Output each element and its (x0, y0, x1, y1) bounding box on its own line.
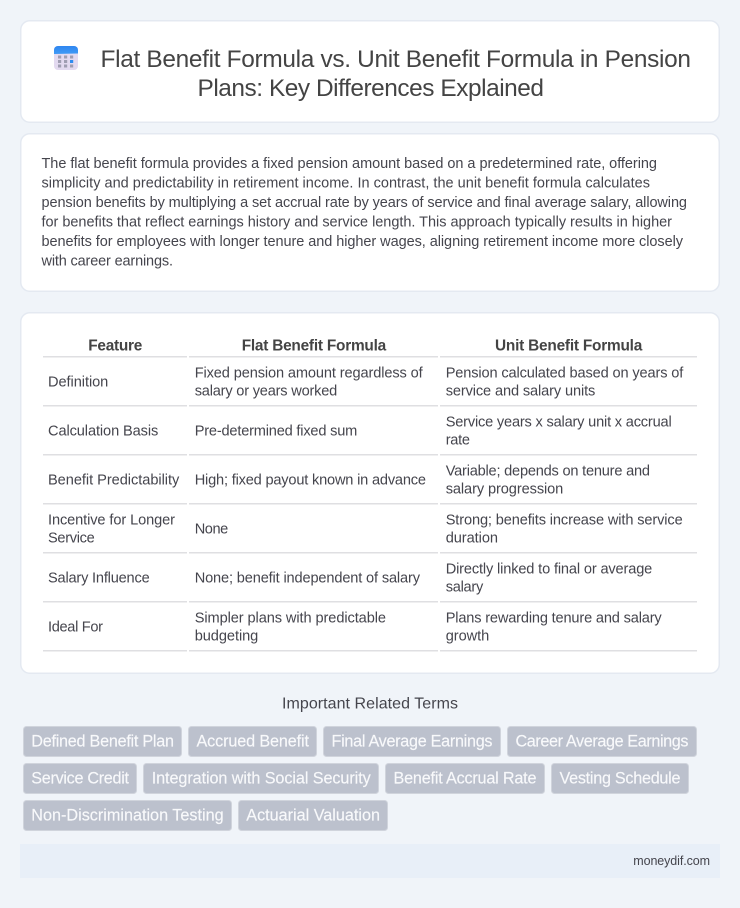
table row: benefit predictability: Variable; depends on tenure and (446, 464, 650, 480)
table row: definition: Pension calculated based on years of (446, 366, 684, 382)
tag: Vesting Schedule: Vesting Schedule (560, 770, 680, 788)
tag: Actuarial Valuation (238, 800, 388, 830)
table header row: Flat Benefit Formula (242, 338, 387, 355)
tag: Career Average Earnings: Career Average Earnings (516, 733, 688, 751)
table row: ideal for: Ideal For (48, 620, 103, 636)
table row: incentive for longer service (48, 513, 683, 547)
table row: incentive for longer service: duration (446, 531, 498, 547)
tag: Service Credit: Service Credit (31, 770, 129, 788)
table row: benefit predictability (48, 464, 650, 498)
footer bar: moneydif.com (633, 854, 710, 868)
panel: introduction text (21, 134, 719, 291)
table row: incentive for longer service: Strong; benefits increase with service (446, 513, 683, 529)
table row: definition (48, 366, 684, 400)
table header row: Unit Benefit Formula (495, 338, 643, 355)
tag: Final Average Earnings (324, 726, 500, 756)
tag: Final Average Earnings: Final Average Earnings (332, 733, 492, 751)
tag: Benefit Accrual Rate: Benefit Accrual Rate (394, 770, 536, 788)
tag: Integration with Social Security: Integration with Social Security (152, 770, 372, 788)
table row: definition: salary or years worked (195, 384, 337, 400)
heading: important related terms: Important Related Terms (282, 696, 458, 712)
tag: Accrued Benefit (188, 726, 316, 756)
table row: benefit predictability: High; fixed payout known in advance (195, 473, 426, 489)
table row: incentive for longer service: Service (48, 531, 95, 547)
table header row (88, 338, 643, 355)
panel: related term tags (24, 726, 696, 830)
table row: benefit predictability: Benefit Predictability (48, 473, 180, 489)
tag: Accrued Benefit: Accrued Benefit (196, 733, 310, 751)
tag: Actuarial Valuation: Actuarial Valuation (246, 807, 380, 825)
panel: introduction text: pension benefits by multiplying a set accrual rate by years of service and final average salary, allowing (42, 195, 687, 211)
table row: incentive for longer service: None (195, 522, 228, 538)
panel: introduction text: benefits for employees with longer tenure and higher wages, aligning retirement income more closely (42, 234, 684, 250)
table row: salary influence: None; benefit independent of salary (195, 571, 421, 587)
table row: calculation basis: Service years x salary unit x accrual (446, 415, 672, 431)
table row: ideal for: Simpler plans with predictable (195, 611, 386, 627)
table row: calculation basis: rate (446, 433, 470, 449)
panel: introduction text: simplicity and predictability in retirement income. In contrast, the unit benefit formula calculates (42, 176, 650, 192)
panel: introduction text: with career earnings. (40, 254, 173, 270)
table row: ideal for: Plans rewarding tenure and salary (446, 611, 662, 627)
panel: introduction text: for benefits that reflect earnings history and service length. This approach typically results in higher (42, 214, 672, 230)
title (100, 46, 691, 102)
table row: incentive for longer service: Incentive for Longer (48, 513, 175, 529)
panel: introduction text: The flat benefit formula provides a fixed pension amount based on a predetermined rate, offering (42, 156, 657, 172)
icon: calendar (54, 46, 78, 70)
tag: Defined Benefit Plan: Defined Benefit Plan (31, 733, 174, 751)
table row: salary influence: salary (446, 580, 484, 596)
table row: salary influence: Salary Influence (48, 571, 150, 587)
table row: definition: service and salary units (446, 384, 595, 400)
table row: salary influence (48, 562, 652, 596)
panel: title card (21, 21, 719, 122)
table row: ideal for (48, 611, 662, 645)
title: Plans: Key Differences Explained (198, 75, 544, 102)
table row: salary influence: Directly linked to final or average (446, 562, 652, 578)
tag: Non-Discrimination Testing (24, 800, 232, 830)
table row: benefit predictability: salary progression (446, 482, 563, 498)
panel: comparison table (21, 313, 719, 673)
table row: calculation basis: Pre-determined fixed sum (195, 424, 357, 440)
table row: calculation basis (48, 415, 672, 449)
footer bar (20, 844, 720, 878)
table row: calculation basis: Calculation Basis (48, 424, 158, 440)
table row: ideal for: growth (446, 629, 489, 645)
table row: definition: Fixed pension amount regardless of (195, 366, 424, 382)
tag: Vesting Schedule (552, 764, 688, 794)
tag: Career Average Earnings (508, 726, 696, 756)
tag: Defined Benefit Plan (24, 726, 182, 756)
table row: definition: Definition (48, 375, 108, 391)
tag: Benefit Accrual Rate (386, 764, 544, 794)
table header row: Feature (88, 338, 143, 355)
table row: ideal for: budgeting (195, 629, 258, 645)
tag: Non-Discrimination Testing: Non-Discrimination Testing (31, 807, 224, 825)
tag: Integration with Social Security (144, 764, 378, 794)
tag: Service Credit (24, 764, 136, 794)
title: Flat Benefit Formula vs. Unit Benefit Formula in Pension (100, 46, 691, 73)
